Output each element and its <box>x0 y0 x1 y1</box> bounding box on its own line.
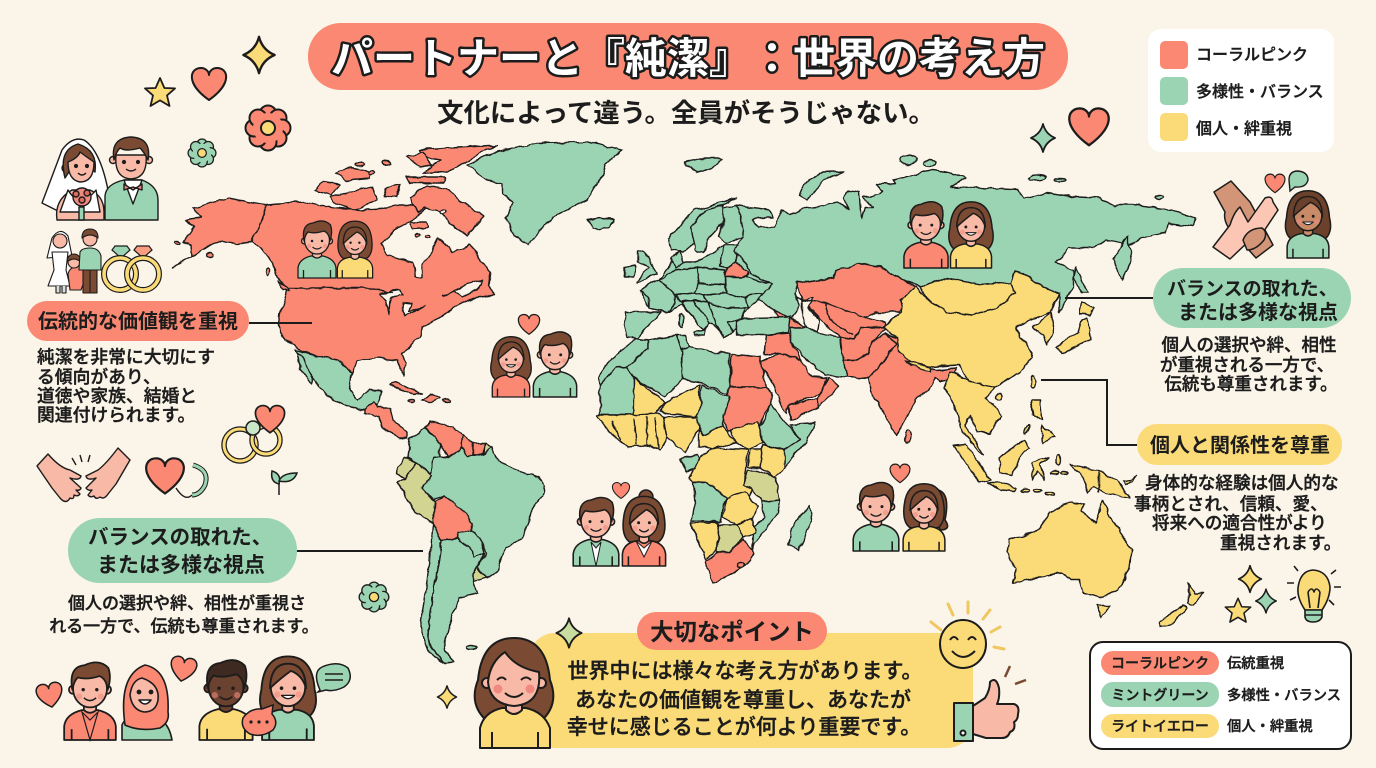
icon: mint speech bubble <box>316 664 350 692</box>
callout: balanced right <box>1153 268 1351 328</box>
couple: canada <box>298 221 373 278</box>
icon: rings with heart <box>224 406 285 461</box>
person: woman with heart and bubble <box>1265 171 1331 258</box>
title: パートナーと『純潔』：世界の考え方 <box>331 35 1045 82</box>
callout: traditional values <box>27 301 249 341</box>
icon: heart top right <box>1069 108 1109 145</box>
russia <box>734 170 1195 320</box>
text: balanced right: 伝統も尊重されます。 <box>1164 374 1338 394</box>
text: traditional values: 道徳や家族、結婚と <box>37 386 197 406</box>
greenland <box>467 142 622 245</box>
text: individual: 事柄とされ、信頼、愛、 <box>1134 494 1328 514</box>
legend: top right: 多様性・バランス <box>1196 83 1324 101</box>
icon: coral flower <box>246 106 290 150</box>
people: man and woman talking <box>199 656 316 740</box>
text: balanced right <box>1160 335 1338 394</box>
central asia middle east south asia <box>736 263 956 442</box>
legend: bottom right: 多様性・バランス <box>1227 686 1341 704</box>
legend: bottom right <box>1090 642 1351 749</box>
connector: left mint callout <box>297 550 423 552</box>
text: traditional values: る傾向があり、 <box>37 366 161 387</box>
legend: bottom right: 個人・絆重視 <box>1227 718 1313 735</box>
legend: top right: コーラルピンク <box>1196 46 1308 64</box>
icon: star top left <box>145 78 175 106</box>
text: traditional values <box>37 347 215 425</box>
russian islands <box>684 155 1163 293</box>
africa <box>597 335 815 583</box>
callout: traditional values: 伝統的な価値観を重視 <box>38 310 238 333</box>
text: balanced left: 個人の選択や絆、相性が重視さ <box>68 593 306 613</box>
panel: key point: 幸せに感じることが何より重要です。 <box>567 715 921 739</box>
icon: sparkle mint bottom right <box>1256 589 1276 613</box>
people: man and woman in hijab <box>64 662 172 740</box>
callout: balanced left: バランスの取れた、 <box>88 526 272 549</box>
north america <box>173 145 497 375</box>
couple: indian ocean <box>853 464 948 551</box>
icon: light bulb <box>1287 566 1341 622</box>
subtitle: 文化によって違う。全員がそうじゃない。 <box>437 98 935 128</box>
callout: balanced right: バランスの取れた、 <box>1167 278 1338 300</box>
text: balanced right: 個人の選択や絆、相性 <box>1162 335 1336 355</box>
connector: yellow callout <box>1041 380 1137 445</box>
person: key point woman <box>475 638 553 748</box>
east asia <box>883 272 1094 400</box>
callout: balanced left <box>68 518 297 583</box>
legend: bottom right: ミントグリーン <box>1111 687 1209 703</box>
text: balanced left: れる一方で、伝統も尊重されます。 <box>49 617 319 636</box>
panel: key point: 大切なポイント <box>650 619 814 645</box>
icon: wedding rings <box>104 246 159 290</box>
europe <box>624 198 772 338</box>
legend: top right: 個人・絆重視 <box>1196 120 1292 138</box>
text: individual: 身体的な経験は個人的な <box>1145 473 1339 493</box>
legend: bottom right: コーラルピンク <box>1111 655 1209 671</box>
text: individual: 重視されます。 <box>1220 533 1341 553</box>
world map <box>173 142 1203 663</box>
callout: balanced right: または多様な視点 <box>1178 301 1338 324</box>
icon: hearts bottom left <box>35 655 198 709</box>
legend: bottom right: 伝統重視 <box>1227 655 1284 672</box>
connector: coral callout <box>249 322 312 324</box>
icon: sparkle small left <box>437 686 457 708</box>
icon: sparkle panel <box>556 618 582 648</box>
legend: bottom right: ライトイエロー <box>1111 718 1209 734</box>
icon: mint flower lower <box>359 582 389 612</box>
icon: sparkle yellow bottom right <box>1239 566 1261 592</box>
mexico central america caribbean <box>295 350 449 438</box>
iceland <box>588 218 613 230</box>
couple: russia <box>904 202 993 268</box>
icon: thumbs up <box>954 666 1026 741</box>
title <box>308 23 1068 90</box>
southeast asia and oceania <box>944 372 1203 627</box>
icon: hands clasp <box>1213 181 1278 259</box>
people: bride and groom <box>42 137 158 220</box>
connector: right mint callout <box>1065 297 1153 299</box>
people: family <box>47 229 101 293</box>
icon: smiling sun <box>931 602 1004 668</box>
icon: star bottom right <box>1225 598 1251 622</box>
callout: balanced left: または多様な視点 <box>97 554 265 577</box>
text: traditional values: 純潔を非常に大切にす <box>37 347 215 367</box>
icon: coral speech bubble <box>242 705 276 735</box>
callout: individual: 個人と関係性を尊重 <box>1150 434 1330 457</box>
icon: sparkle mint top right <box>1031 124 1055 152</box>
text: balanced right: が重視される一方で、 <box>1160 355 1334 375</box>
icon: sparkle yellow top <box>243 37 275 73</box>
icon: mint flower <box>188 139 216 167</box>
panel: key point <box>529 612 973 748</box>
text: balanced left <box>49 593 319 636</box>
icon: sprout <box>272 471 297 495</box>
legend: top right <box>1148 29 1334 152</box>
couple: atlantic <box>491 314 577 397</box>
couple: africa west side <box>573 482 666 566</box>
panel: key point: 世界中には様々な考え方があります。 <box>568 660 922 683</box>
text: traditional values: 関連付けられます。 <box>37 405 195 425</box>
icon: heart top left <box>192 68 226 100</box>
south america <box>397 421 545 663</box>
callout: individual <box>1137 424 1342 465</box>
panel: key point: あなたの価値観を尊重し、あなたが <box>575 689 911 712</box>
text: individual <box>1134 473 1341 553</box>
icon: joining hands <box>37 448 130 502</box>
icon: heart with bracelet <box>146 458 206 497</box>
text: individual: 将来への適合性がより <box>1152 513 1327 533</box>
